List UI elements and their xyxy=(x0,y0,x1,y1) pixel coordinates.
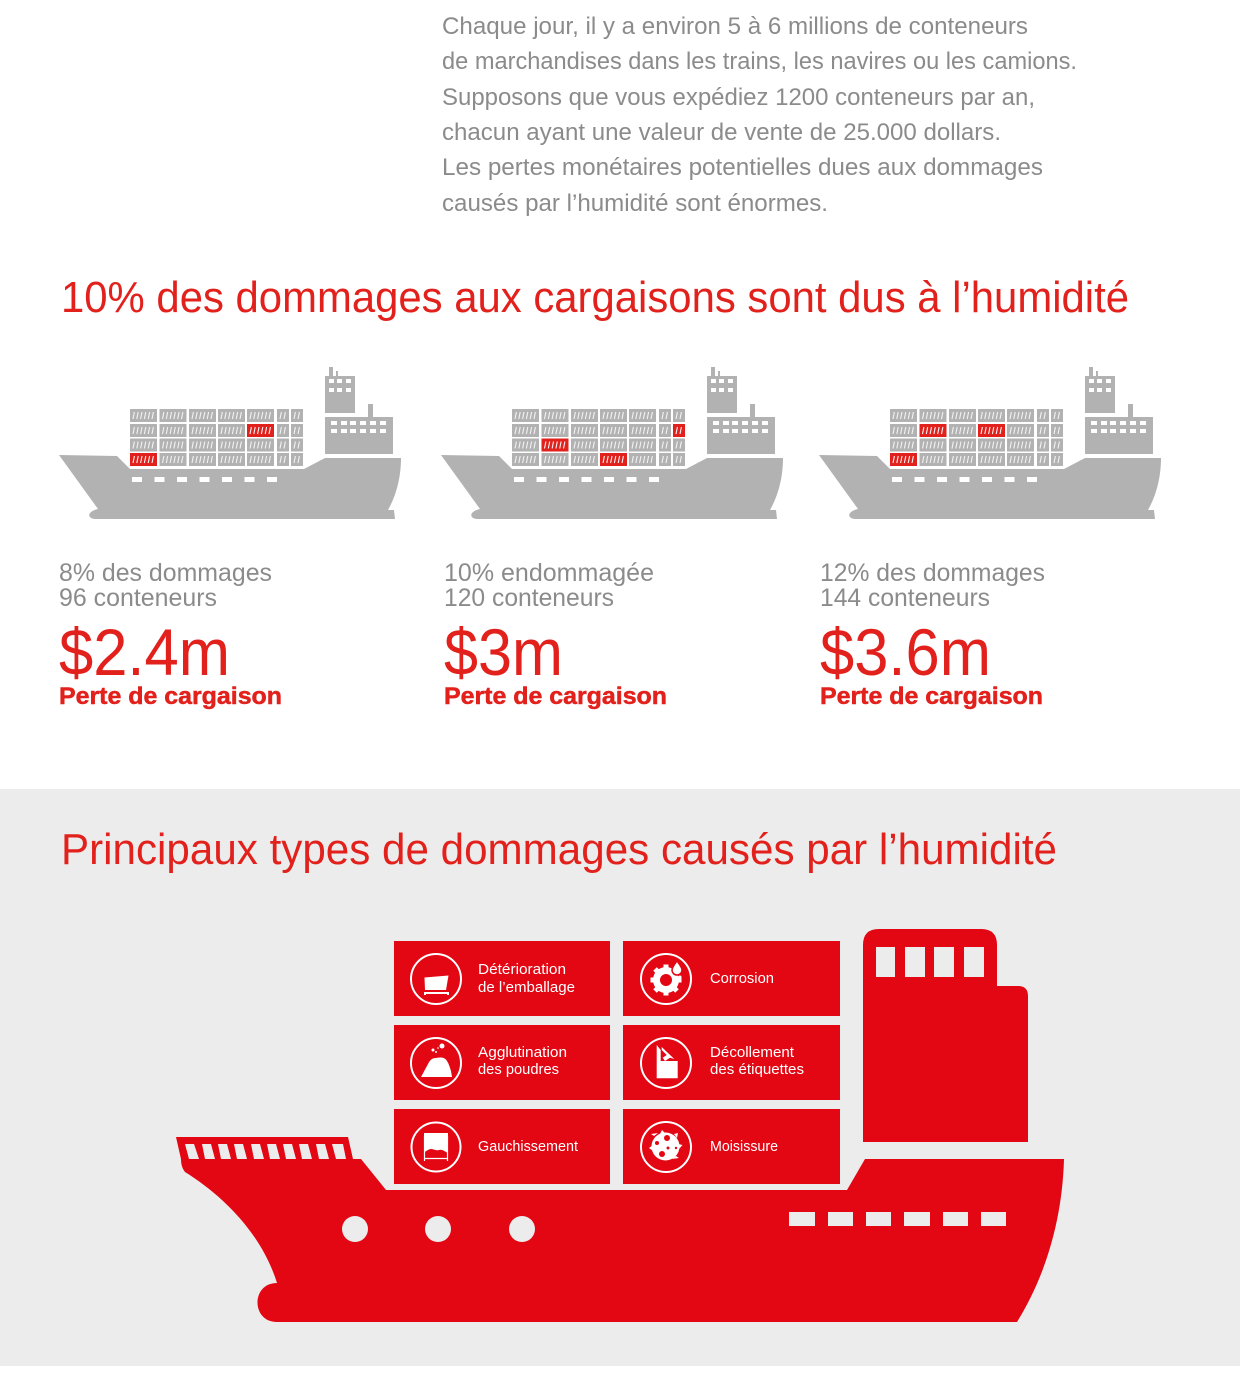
intro paragraph: Chaque jour, il y a environ 5 à 6 millions de conteneurs xyxy=(442,13,1028,40)
ship 3: grey ship with 3 red containers xyxy=(819,367,1161,519)
box: corrosion: Corrosion xyxy=(710,970,774,987)
box: warping xyxy=(394,1109,610,1184)
stat column 2: 120 conteneurs xyxy=(444,584,614,612)
icon: damaged box xyxy=(411,954,461,1004)
panel: damage types background xyxy=(0,789,1240,1366)
stat column 1: $2.4m xyxy=(59,615,230,689)
box: warping: Gauchissement xyxy=(478,1138,579,1155)
ship 2: grey ship with 3 red containers xyxy=(441,367,783,519)
icon: powder heap xyxy=(411,1038,461,1088)
box: powder caking: Agglutination xyxy=(478,1044,567,1061)
stat column 1: Perte de cargaison xyxy=(59,683,282,710)
box: label peeling: Décollement xyxy=(710,1044,795,1061)
heading: main damage types: Principaux types de dommages causés par l’humidité xyxy=(61,825,1057,874)
stat column 3: Perte de cargaison xyxy=(820,683,1043,710)
stat column 1 xyxy=(59,559,282,710)
icon: mould spore xyxy=(641,1122,691,1172)
intro paragraph: chacun ayant une valeur de vente de 25.000 dollars. xyxy=(442,119,1001,146)
intro paragraph: causés par l’humidité sont énormes. xyxy=(442,190,828,217)
icon: gear and drop xyxy=(641,954,691,1004)
box: mould xyxy=(623,1109,840,1184)
intro paragraph: Supposons que vous expédiez 1200 conteneurs par an, xyxy=(442,84,1035,111)
box: packaging damage xyxy=(394,941,610,1016)
stat column 3: 144 conteneurs xyxy=(820,584,990,612)
box: powder caking xyxy=(394,1025,610,1100)
stat column 1: 8% des dommages xyxy=(59,559,272,587)
box: packaging damage: de l’emballage xyxy=(478,979,575,996)
intro paragraph xyxy=(442,13,1077,217)
stat column 3 xyxy=(820,559,1045,710)
heading: 10% of damages: 10% des dommages aux cargaisons sont dus à l’humidité xyxy=(61,273,1129,322)
stat column 2: Perte de cargaison xyxy=(444,683,667,710)
box: label peeling xyxy=(623,1025,840,1100)
box: label peeling: des étiquettes xyxy=(710,1061,804,1078)
stat column 2: $3m xyxy=(444,615,563,689)
icon: peeling label xyxy=(641,1038,691,1088)
icon: warped sheet xyxy=(412,1122,460,1172)
stat column 3: 12% des dommages xyxy=(820,559,1045,587)
box: corrosion xyxy=(623,941,840,1016)
intro paragraph: de marchandises dans les trains, les navires ou les camions. xyxy=(442,48,1077,75)
ship 1: grey ship with 2 red containers xyxy=(59,367,401,519)
intro paragraph: Les pertes monétaires potentielles dues aux dommages xyxy=(442,154,1043,181)
box: mould: Moisissure xyxy=(710,1138,778,1155)
box: packaging damage: Détérioration xyxy=(478,961,566,978)
red ship illustration xyxy=(176,929,1064,1322)
stat column 2: 10% endommagée xyxy=(444,559,654,587)
stat column 3: $3.6m xyxy=(820,615,991,689)
stat column 1: 96 conteneurs xyxy=(59,584,217,612)
box: powder caking: des poudres xyxy=(478,1061,559,1078)
stat column 2 xyxy=(444,559,667,710)
